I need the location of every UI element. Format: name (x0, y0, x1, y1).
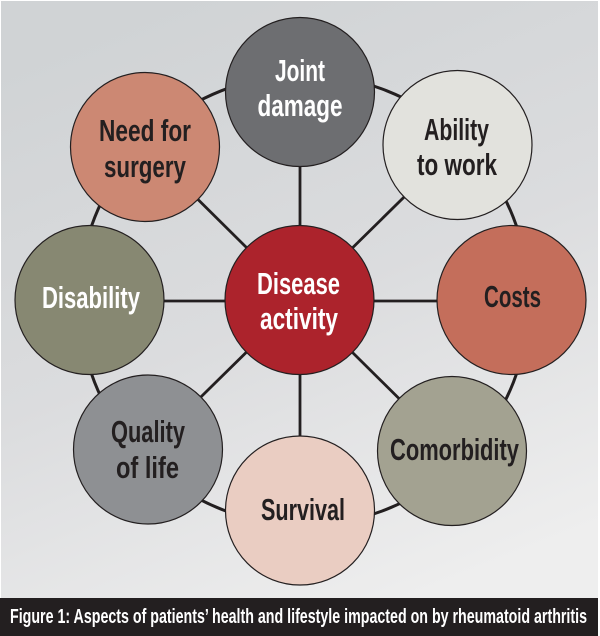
node: Comorbidity: Comorbidity (390, 432, 520, 467)
node: Quality of life (74, 375, 222, 524)
node: Survival: Survival (261, 492, 345, 527)
node: Joint damage (226, 18, 374, 166)
node: Need for surgery: Need for (99, 113, 191, 148)
node: Disability: Disability (42, 280, 141, 315)
caption bar (0, 598, 598, 636)
node: Need for surgery (70, 72, 220, 222)
node: Ability to work: to work (417, 147, 498, 182)
node: Disease activity (225, 226, 374, 374)
node: Comorbidity (378, 376, 526, 526)
outer ring connector lines (79, 75, 529, 525)
node: Ability to work (383, 70, 532, 220)
node: Joint damage: Joint (275, 53, 325, 88)
node: Disease activity: Disease (257, 266, 340, 301)
node: Quality of life: Quality (111, 414, 186, 449)
node: Need for surgery: surgery (104, 149, 187, 184)
node: Survival (226, 436, 374, 585)
node: Disease activity: activity (260, 301, 339, 336)
node: Quality of life: of life (116, 450, 179, 485)
node: Joint damage: damage (258, 88, 342, 123)
node: Disability (15, 226, 164, 374)
node: Costs (437, 226, 586, 374)
spoke connector lines (100, 120, 500, 490)
node: Costs: Costs (484, 279, 541, 314)
node: Ability to work: Ability (424, 112, 490, 147)
